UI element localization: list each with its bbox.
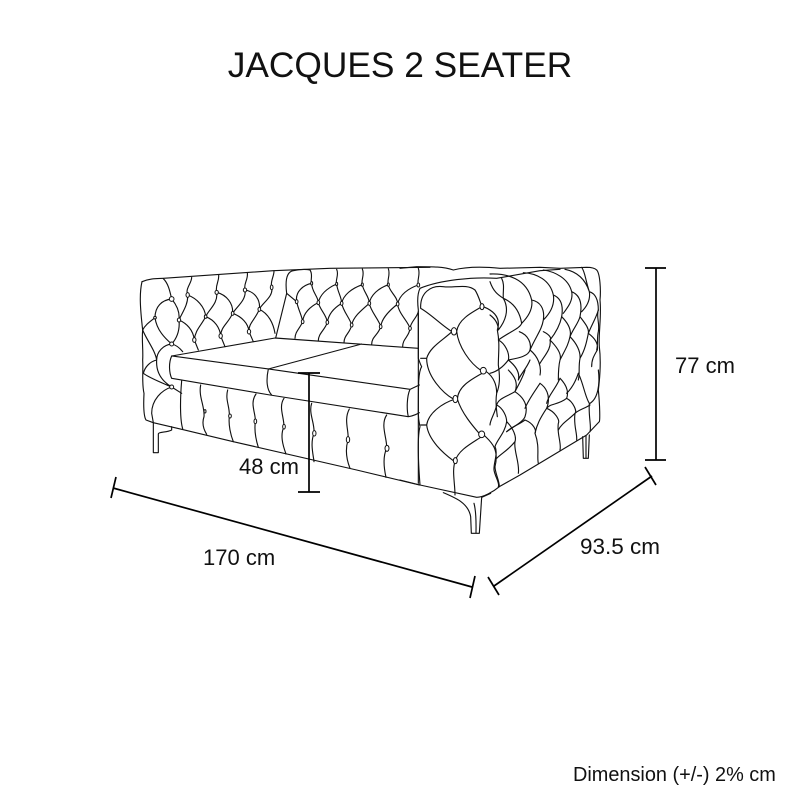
label: 48 cm: 48 cm — [239, 454, 299, 479]
label: 77 cm: 77 cm — [675, 353, 735, 378]
label: 170 cm: 170 cm — [203, 545, 275, 570]
footnote: dimension tolerance: Dimension (+/-) 2% cm — [573, 764, 776, 786]
label: 93.5 cm: 93.5 cm — [580, 534, 660, 559]
sofa back left leg — [153, 423, 172, 453]
dimension: 77 cm height — [645, 268, 666, 460]
sofa line drawing — [140, 267, 600, 533]
dimension: 170 cm width — [111, 477, 475, 598]
sofa left arm, back, seat and front panel — [140, 267, 430, 485]
sofa right arm front face and legs — [400, 267, 600, 533]
title: JACQUES 2 SEATER — [228, 46, 572, 85]
sofa right arm upper side tufting — [490, 267, 599, 380]
sofa right arm lower side tufting — [490, 370, 599, 487]
dimension: 48 cm height — [298, 373, 320, 492]
dimension: 93.5 cm depth — [488, 467, 656, 595]
